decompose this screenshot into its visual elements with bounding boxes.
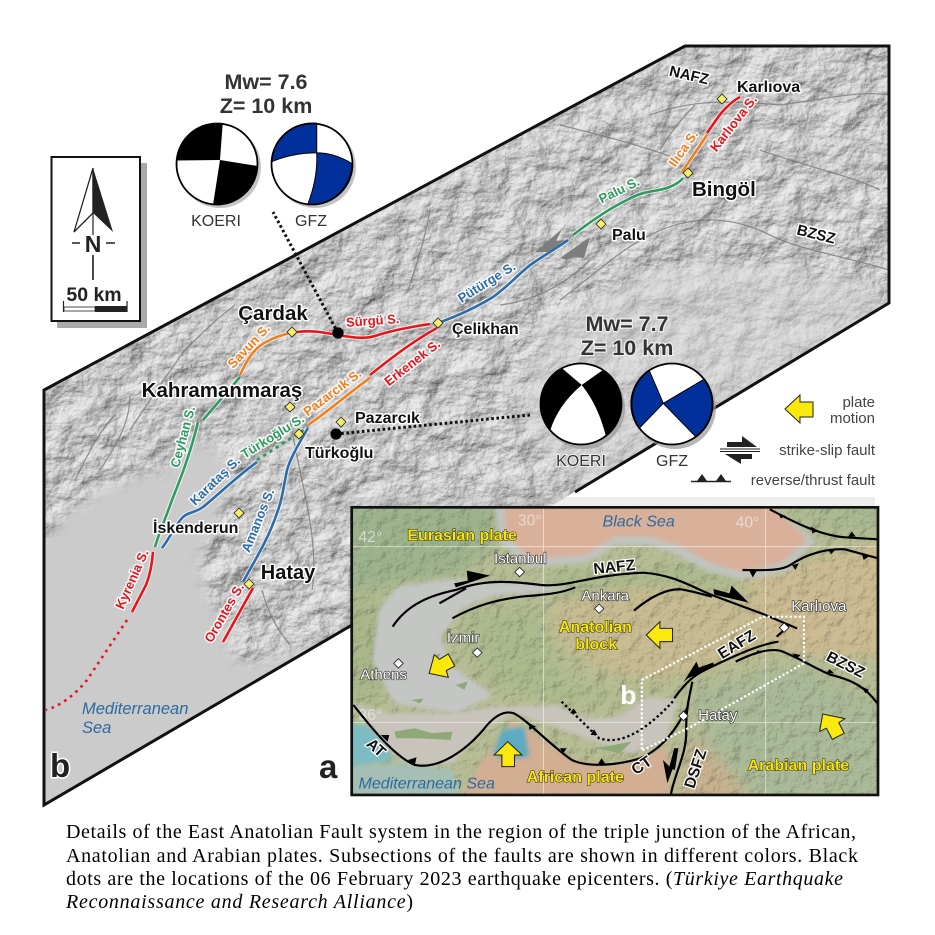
city labels [142, 63, 837, 584]
fault zone labels: NAFZ [593, 557, 637, 578]
segment labels: Erkenek S. [381, 336, 443, 389]
label KOERI: KOERI [191, 213, 241, 230]
fault zone labels: CT [628, 753, 656, 779]
Orontes segment [223, 588, 253, 642]
Sürgü segment [297, 324, 430, 338]
icon: thrust fault [691, 474, 731, 482]
faults: coloured fault segments [46, 97, 740, 710]
white dotted outline of panel b [642, 617, 804, 751]
fault zone labels: EAFZ [715, 627, 759, 663]
leader line: epicenter 2 to focal mechanisms [336, 415, 530, 434]
blue deep waters [350, 723, 529, 795]
scale bar [64, 301, 127, 312]
north arrow and scale box [52, 157, 147, 328]
Karlıova segment [707, 97, 740, 133]
magnitude heading: Mw= 7.6 [224, 70, 308, 94]
city labels: Türkoğlu [305, 445, 373, 462]
city labels: Bingöl [692, 178, 756, 201]
label: Mediterranean Sea [82, 700, 188, 737]
beachball GFZ [272, 123, 352, 205]
label GFZ: GFZ [656, 453, 688, 470]
grid labels: 42° [359, 529, 382, 546]
grid labels: 40° [736, 514, 759, 531]
Cyprus arc trench [353, 705, 688, 766]
label: Mediterranean Sea: Mediterranean [82, 700, 188, 718]
sea labels: Mediterranean Sea [359, 776, 495, 793]
Türkoğlu dotted segment [257, 428, 307, 460]
Levant basin [463, 720, 669, 795]
beachball GFZ [631, 364, 713, 444]
soft shadow of inset [345, 497, 875, 511]
grid labels: 30° [518, 512, 542, 529]
fault zone labels: AT [363, 735, 389, 761]
city names: İstanbul [494, 549, 547, 567]
leader line: epicenter 1 to focal mechanisms [273, 212, 338, 333]
plate labels: Arabian plate [748, 758, 849, 775]
panel border [44, 46, 889, 805]
Kyrenia offshore dotted trace [46, 620, 127, 710]
beachball KOERI [540, 363, 622, 445]
scale label: 50 km [66, 284, 122, 306]
epicenter 1 [332, 327, 344, 339]
plate labels: African plate [527, 769, 624, 786]
caption: Anatolian and Arabian plates. Subsections of the faults are shown in different colors. Black [66, 845, 858, 867]
sea labels [359, 514, 675, 793]
panel b: hillshade relief map [30, 46, 900, 820]
plate labels: block [575, 637, 617, 654]
segment labels: Orontes S. [201, 581, 247, 645]
city names: İzmir [447, 629, 479, 647]
city diamonds [394, 567, 789, 721]
grid labels [359, 512, 759, 724]
DSFZ trace [671, 682, 692, 795]
Aegean [372, 578, 514, 713]
icon: strike-slip fault [720, 436, 760, 464]
NAFZ and Anatolian fault traces [393, 573, 797, 628]
beachball KOERI [176, 123, 258, 205]
segment labels: Palu S. [596, 174, 642, 206]
Amanos segment [243, 428, 308, 582]
segment labels: Ceyhan S. [167, 405, 198, 469]
panel letter a: a [319, 748, 338, 785]
caption: Reconnaissance and Research Alliance) [65, 891, 413, 913]
city labels: Palu [612, 227, 646, 244]
label KOERI: KOERI [556, 453, 606, 470]
fault zone labels [363, 557, 868, 791]
fault zone labels: BZSZ [823, 649, 868, 682]
segment labels: Karataş S. [187, 453, 243, 508]
Ceyhan segment [155, 377, 240, 547]
panel a: inset tectonic map [350, 506, 880, 796]
plate labels: Eurasian plate [407, 528, 517, 545]
Kyrenia segment [132, 552, 153, 612]
depth heading: Z= 10 km [220, 94, 312, 118]
segment labels: Karlıova S. [707, 92, 760, 154]
caption: Details of the East Anatolian Fault system in the region of the triple junction of the African, [66, 821, 856, 843]
magnitude heading: Mw= 7.7 [585, 312, 669, 336]
letter N: N [85, 231, 101, 257]
city labels: Pazarcık [355, 410, 420, 427]
Marmara [463, 583, 572, 596]
Palu segment [573, 178, 683, 235]
segment labels: Türkoğlu S. [238, 411, 307, 461]
segment labels: Pütürge S. [455, 259, 518, 306]
segment labels: Sürgü S. [346, 311, 400, 330]
Mediterranean north [350, 697, 678, 767]
city labels: NAFZ [668, 63, 710, 88]
Pazarcık segment [308, 378, 370, 425]
Pütürge segment [438, 240, 568, 323]
EAFZ and Arabian thrust traces [674, 626, 877, 703]
city labels: İskenderun [153, 519, 238, 537]
legend text: strike-slip: strike-slip fault [779, 442, 876, 459]
Karataş segment [162, 462, 257, 548]
Ilıca segment [682, 135, 707, 172]
city labels: Kahramanmaraş [142, 379, 302, 402]
thrust teeth [381, 513, 869, 765]
Upper right thrust traces [742, 509, 878, 570]
plate labels [407, 528, 849, 786]
panel letter b: b [50, 747, 70, 784]
icon: north arrow [74, 168, 113, 235]
Black Sea [495, 507, 816, 580]
city labels: Çardak [238, 302, 308, 325]
segment labels: Pazarcık S. [300, 366, 364, 419]
epicenter 2 [330, 428, 342, 440]
caption: dots are the locations of the 06 February 2023 earthquake epicenters. (Türkiye Earthquake [66, 868, 843, 890]
city names: Ankara [581, 589, 630, 605]
legend: motion [830, 410, 875, 427]
city markers: yellow diamonds [234, 94, 727, 589]
caption [65, 821, 858, 913]
city names: Karlıova [791, 599, 847, 615]
legend text: plate motion: plate [842, 394, 875, 411]
Dotted trench [562, 700, 674, 740]
panel letter b in inset: b [620, 680, 637, 710]
grid labels: 36° [359, 707, 382, 724]
segment labels: Ilıca S. [665, 127, 701, 170]
label GFZ: GFZ [295, 213, 327, 230]
segment labels: Amanos S. [238, 486, 277, 554]
terrain layers [353, 508, 877, 794]
yellow plate arrows [646, 622, 673, 648]
segment labels [112, 92, 760, 645]
grid lines [352, 507, 878, 795]
city labels: Çelikhan [452, 321, 519, 338]
fault zone labels: DSFZ [682, 747, 711, 791]
city names: Athens [360, 667, 407, 683]
icon: plate motion arrow [785, 395, 813, 423]
depth heading: Z= 10 km [581, 336, 673, 360]
legend [691, 394, 876, 489]
label: Mediterranean Sea: Sea [82, 719, 111, 737]
strike-slip half arrows [454, 571, 749, 783]
strike-slip arrows on Pütürge fault [535, 229, 590, 260]
sea labels: Black Sea [603, 514, 675, 531]
Crete and islands [394, 653, 632, 753]
plate labels: Anatolian [559, 619, 632, 636]
event 2 focal mechanisms [540, 312, 716, 470]
city names: Hatay [698, 708, 738, 724]
event 1 focal mechanisms [176, 70, 356, 230]
city labels: Karlıova [737, 79, 800, 96]
Erkenek segment [370, 328, 437, 375]
Savun segment [240, 333, 290, 375]
segment labels: Savun S. [224, 321, 273, 371]
city labels: Hatay [261, 562, 316, 584]
city names [360, 549, 847, 724]
inset frame [352, 507, 878, 795]
legend text: thrust: reverse/thrust fault [751, 472, 876, 489]
city labels: BZSZ [795, 222, 837, 248]
segment labels: Kyrenia S. [112, 547, 152, 611]
